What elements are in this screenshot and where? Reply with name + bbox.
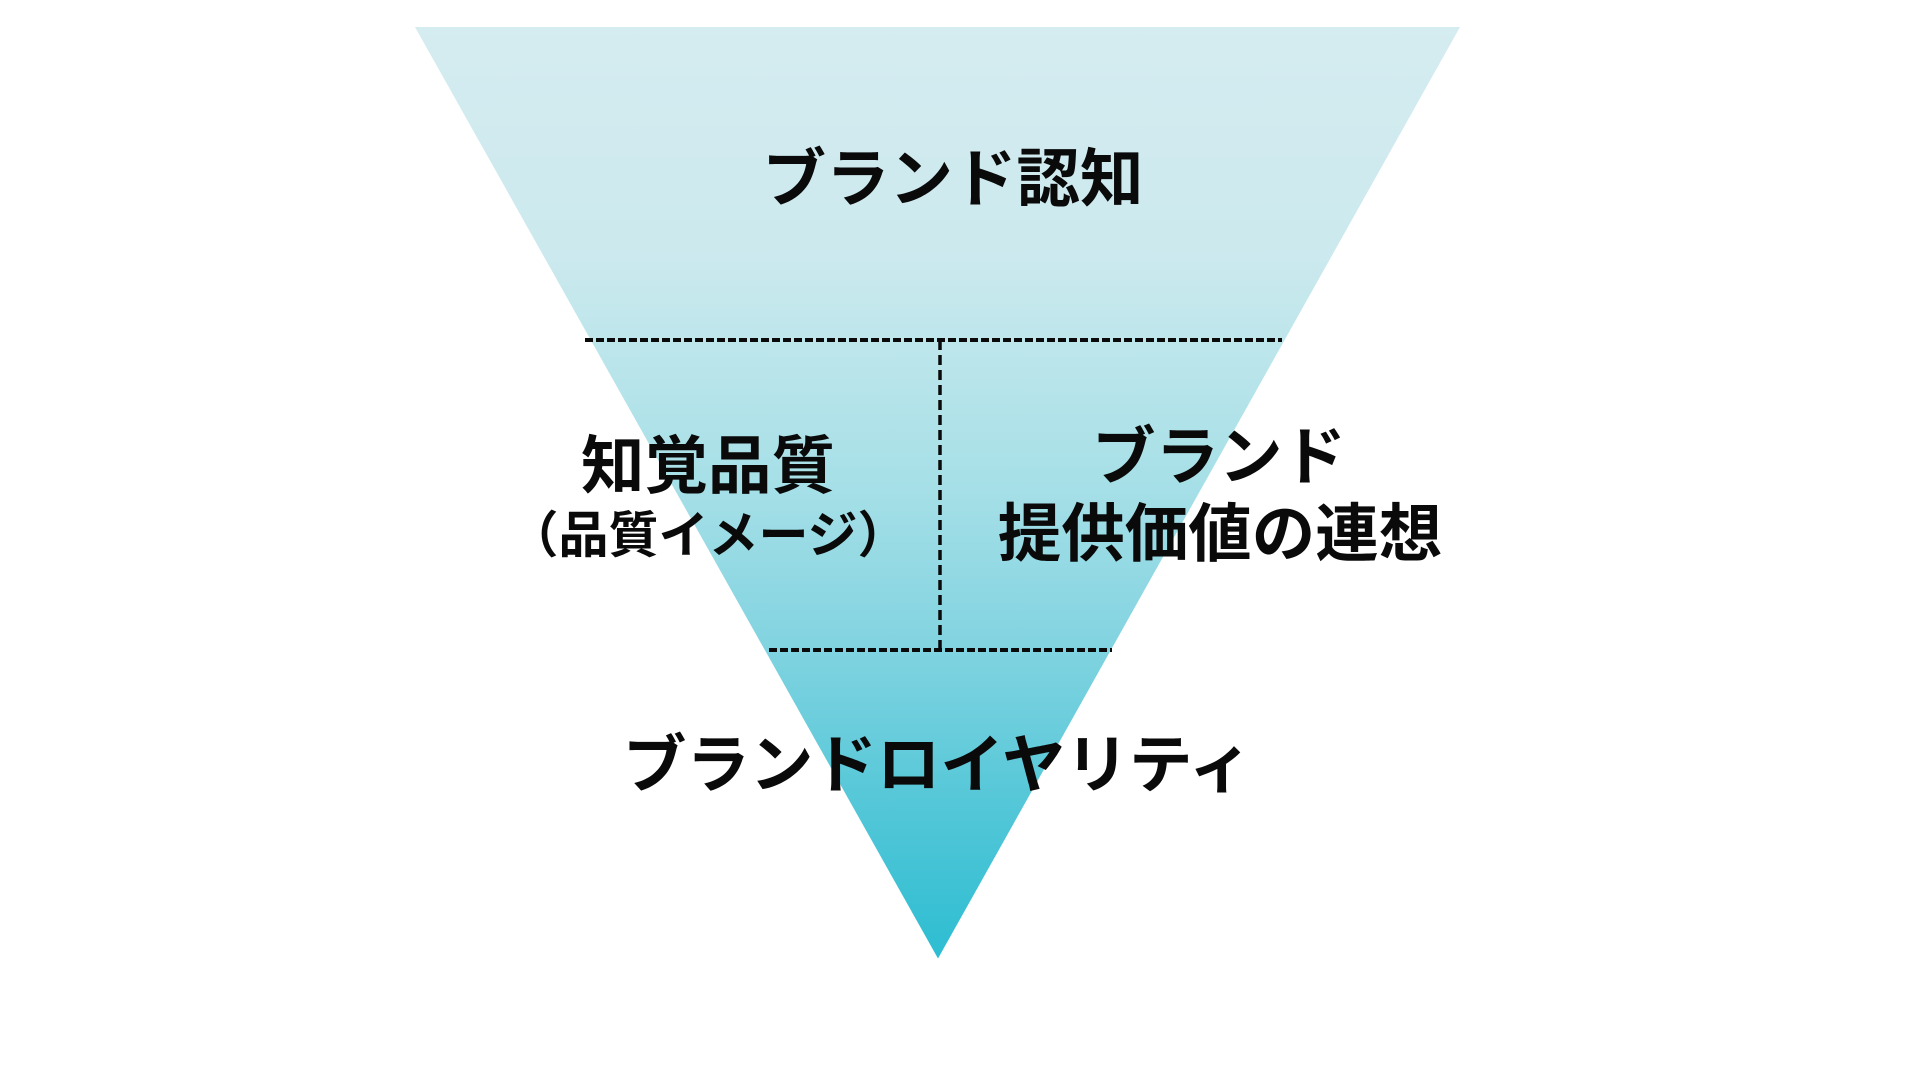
label: brand loyalty: ブランドロイヤリティ [623,731,1252,801]
label: brand value association [998,423,1442,570]
inverted triangle [415,27,1460,958]
label: perceived quality [508,432,908,564]
divider: upper horizontal [585,338,1282,342]
divider: center vertical [938,340,942,650]
label: brand value association: 提供価値の連想 [998,500,1442,570]
sublabel: quality image: （品質イメージ） [508,508,908,564]
label: brand awareness: ブランド認知 [762,145,1144,215]
label: brand value association: ブランド [1092,423,1346,493]
label: perceived quality: 知覚品質 [581,432,835,502]
divider: lower horizontal [769,648,1112,652]
